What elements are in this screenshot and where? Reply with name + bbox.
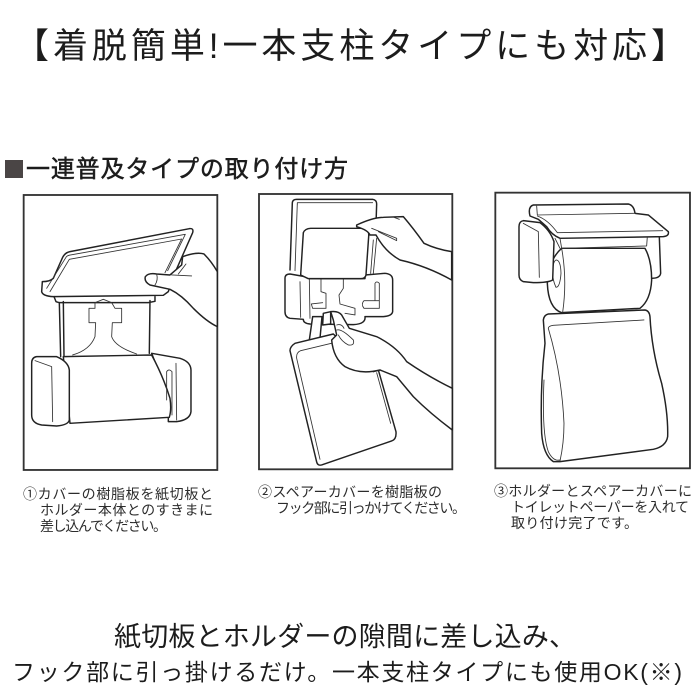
icon: heading square <box>5 160 23 178</box>
holder with hook plate <box>285 273 393 325</box>
hooked straps <box>309 312 331 340</box>
tilted resin board <box>42 229 193 297</box>
caption: step 3 <box>494 483 692 531</box>
caption: step 1: ホルダー本体とのすきまに <box>40 502 213 518</box>
holder body <box>32 353 191 426</box>
panel: step 2 illustration <box>259 194 452 469</box>
bottom message: 紙切板とホルダーの隙間に差し込み、 <box>114 622 576 652</box>
caption: step 2: フック部に引っかけてください。 <box>276 500 466 516</box>
section heading: 一連普及タイプの取り付け方 <box>26 156 348 183</box>
panel: step 3 illustration <box>495 193 690 468</box>
caption: step 1: ①カバーの樹脂板を紙切板と <box>23 486 213 502</box>
caption: step 1 <box>23 486 213 534</box>
caption: step 3: ③ホルダーとスペアーカバーに <box>494 483 692 499</box>
front board being pulled <box>301 228 369 279</box>
upper hand finger detail <box>372 217 399 241</box>
holder left cap detail <box>523 223 539 277</box>
panel: step 1 illustration <box>24 195 217 470</box>
holder right side <box>652 237 661 278</box>
spare paper cover <box>541 310 668 462</box>
lower hand finger detail <box>337 325 354 345</box>
thumb detail <box>155 264 192 285</box>
toilet paper roll <box>547 248 652 313</box>
pouch <box>290 334 396 465</box>
bottom message <box>12 622 682 685</box>
holder left cap <box>519 221 554 283</box>
upper hand <box>357 217 452 280</box>
caption: step 2 <box>258 484 466 516</box>
title: 【着脱簡単!一本支柱タイプにも対応】 <box>14 27 686 66</box>
caption: step 2: ②スペアーカバーを樹脂板の <box>258 484 442 500</box>
caption: step 3: 取り付け完了です。 <box>511 515 638 531</box>
caption: step 3: トイレットペーパーを入れて <box>511 499 689 515</box>
paper cutter lid <box>529 204 668 248</box>
caption: step 1: 差し込んでください。 <box>40 518 167 534</box>
back board <box>290 199 377 273</box>
bottom message: フック部に引っ掛けるだけ。一本支柱タイプにも使用OK(※) <box>12 659 682 685</box>
lower hand <box>331 311 452 430</box>
resin plate with hook cutout <box>54 297 155 357</box>
hand holding board <box>145 253 217 327</box>
